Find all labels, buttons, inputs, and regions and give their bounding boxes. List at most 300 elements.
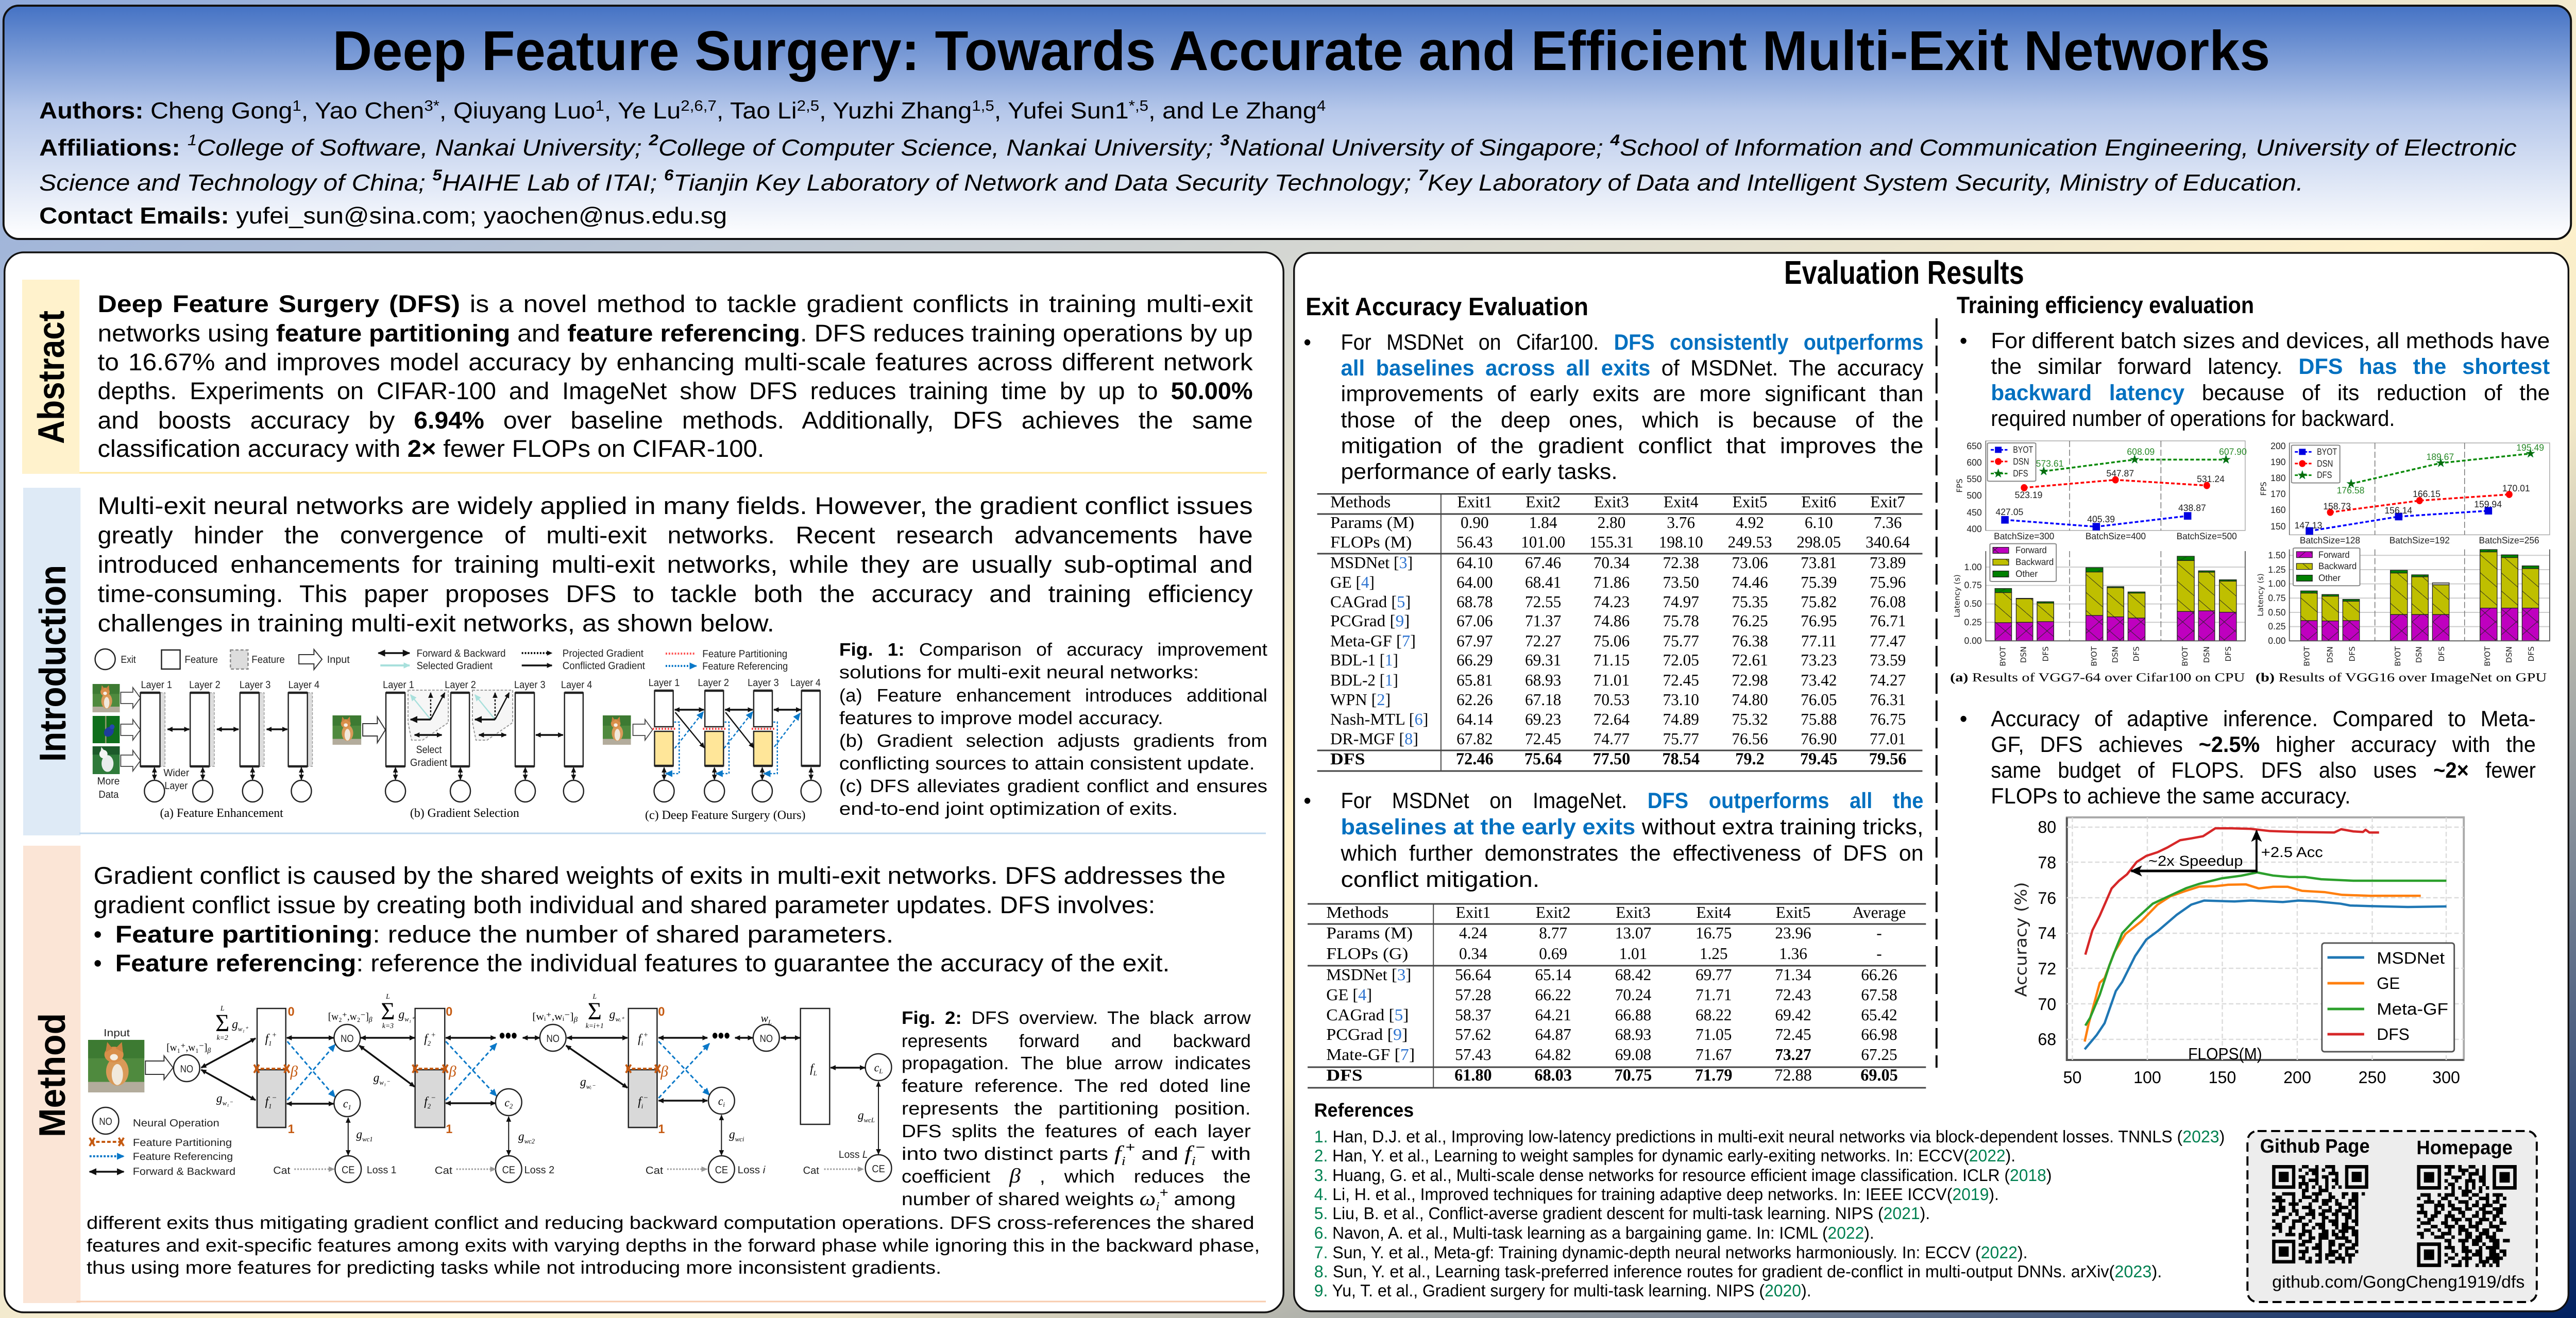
chart: VGG7-64 FPS line chart: 573.61 (2036, 458, 2063, 469)
table: imagenet: 71.71 (1696, 985, 1732, 1004)
chart: VGG16 latency bar chart: DSN (2326, 646, 2334, 663)
chart: VGG7-64 latency bar chart: DSN (2202, 646, 2211, 663)
figure 1 legend: Feature (184, 654, 218, 665)
table: cifar100: Meta-GF [7] (1330, 631, 1416, 650)
backward latency bullet: the similar forward latency. DFS has the shortest (1991, 354, 2550, 379)
table: imagenet: 71.79 (1695, 1066, 1732, 1085)
feature math labels: − (272, 1094, 277, 1102)
section: method (23, 846, 1266, 1303)
table: imagenet: DFS (1326, 1066, 1363, 1084)
table: cifar100: 73.42 (1801, 671, 1837, 689)
feature math labels: g (858, 1109, 864, 1122)
table: imagenet: 68.93 (1615, 1025, 1651, 1043)
feature math labels: wc2 (524, 1137, 535, 1145)
imagenet bullet: For MSDNet on ImageNet. DFS outperforms all the (1341, 789, 1923, 813)
table: cifar100: Params (M) (1330, 513, 1414, 532)
accuracy chart tick labels: 50 (2063, 1068, 2081, 1087)
chart: VGG16 FPS line chart: BatchSize=192 (2389, 535, 2450, 545)
table: cifar100: 73.06 (1732, 553, 1768, 572)
table: cifar100: 74.80 (1732, 690, 1768, 709)
table: imagenet: 72.45 (1775, 1025, 1811, 1043)
feature math labels: w₁⁺ (404, 1015, 415, 1023)
orange partition markers: 0 (446, 1005, 452, 1019)
neural operation and exit nodes: c (343, 1097, 348, 1110)
(a) feature enhancement: (a) Feature Enhancement (160, 807, 283, 820)
table: cifar100: 73.10 (1663, 690, 1699, 709)
neural operation and exit nodes: c (874, 1061, 879, 1074)
orange partition markers: 1 (446, 1122, 452, 1136)
(b) gradient selection: Layer 2 (445, 679, 476, 691)
chart: VGG7-64 FPS line chart: 550 (1967, 474, 1982, 484)
feature math labels: + (431, 1031, 436, 1039)
table: imagenet: 68.22 (1696, 1005, 1732, 1024)
table: imagenet: 64.87 (1535, 1025, 1571, 1043)
orange partition markers: 1 (658, 1122, 665, 1136)
chart: VGG16 latency bar chart: DSN (2504, 646, 2514, 663)
table: cifar100: 73.50 (1663, 573, 1699, 591)
figure 1 legend: Forward & Backward (417, 648, 505, 659)
references: 3. Huang, G. et al., Multi-scale dense networks for resource efficient image classification. ICLR (2018) (1314, 1166, 2052, 1185)
backward latency bullet: required number of operations for backward. (1991, 406, 2395, 431)
feature math labels: L (385, 993, 390, 1001)
feature math labels: 2 (428, 1102, 431, 1110)
references (1314, 1100, 2225, 1300)
table: cifar100: 72.61 (1732, 651, 1768, 669)
accuracy gain and speedup arrows: +2.5 Acc (2261, 844, 2323, 860)
orange partition markers: 0 (658, 1005, 665, 1019)
table: imagenet: 57.28 (1455, 985, 1492, 1004)
neural operation and exit nodes: ••• (499, 1024, 517, 1047)
table: cifar100: 71.86 (1594, 573, 1630, 591)
table: cifar100: 67.97 (1456, 631, 1493, 650)
orange partition markers: 0 (288, 1005, 295, 1019)
references: 8. Sun, Y. et al., Learning task-preferred inference routes for gradient de-conflict in multi-output DNNs. arXiv( 2023). (1314, 1262, 2162, 1281)
table: imagenet: 71.34 (1775, 965, 1811, 984)
figure 2 caption: feature reference. The red doted line (902, 1076, 1251, 1096)
chart: VGG7-64 latency bar chart: Forward (2015, 545, 2047, 555)
introduction text: introduced enhancements for training multi-exit networks, while they are usually sub-optimal and (97, 551, 1253, 578)
table: cifar100: Exit7 (1870, 492, 1905, 511)
figure 2 legend (90, 1107, 235, 1177)
figure 1 legend: Feature Partitioning (702, 648, 787, 660)
feature math labels: g (580, 1075, 586, 1089)
chart: VGG7-64 latency bar chart: 0.75 (1964, 580, 1982, 590)
chart: VGG7-64 FPS line chart: BYOT (2013, 444, 2033, 455)
chart: VGG16 FPS line chart: 156.14 (2384, 505, 2412, 516)
table: cifar100: 340.64 (1866, 533, 1910, 551)
chart: VGG7-64 latency bar chart: DFS (2132, 646, 2141, 661)
accuracy chart legend: Meta-GF (2377, 1000, 2448, 1018)
accuracy gain and speedup arrows (2131, 831, 2323, 872)
chart captions: (a) Results of VGG7-64 over Cifar100 on CPU (1950, 671, 2245, 684)
chart: VGG7-64 latency bar chart (1953, 544, 2245, 666)
feature math labels: k=3 (382, 1022, 394, 1030)
authors: , and Le Zhang (1148, 97, 1317, 124)
table: cifar100: 75.96 (1870, 573, 1906, 591)
table: cifar100: 67.46 (1525, 553, 1561, 572)
figure 2 caption: − (1196, 1139, 1205, 1155)
section: introduction (23, 488, 1267, 835)
figure 1 caption: (c) DFS alleviates gradient conflict and ensures (839, 776, 1267, 796)
feature math labels: g (374, 1071, 379, 1085)
table: cifar100: 72.05 (1663, 651, 1699, 669)
table: cifar100: 76.71 (1870, 611, 1906, 630)
table: cifar100: 64.10 (1456, 553, 1493, 572)
introduction text: challenges in training multi-exit networks, as shown below. (97, 609, 774, 637)
chart: VGG7-64 FPS line chart: 547.87 (2106, 468, 2134, 478)
affiliations: Affiliations: (39, 134, 180, 161)
figure 1 legend: Exit (121, 654, 136, 665)
neural operation and exit nodes: 1 (348, 1103, 351, 1111)
table: cifar100: Exit5 (1733, 492, 1767, 511)
header panel (4, 6, 2571, 239)
table: cifar100: 70.34 (1594, 553, 1630, 572)
table: imagenet: 68.42 (1615, 965, 1651, 984)
authors: 3* (424, 98, 439, 114)
table: cifar100: 78.54 (1662, 750, 1700, 768)
orange partition markers: β (660, 1063, 668, 1080)
table: imagenet: 57.43 (1455, 1045, 1492, 1064)
figure 1 legend: Input (327, 654, 350, 665)
feature math labels: i (641, 1039, 643, 1047)
loss labels: Loss i (738, 1165, 766, 1176)
table: imagenet: 70.24 (1615, 985, 1651, 1004)
table: cifar100: MSDNet [3] (1330, 553, 1413, 572)
chart: VGG7-64 FPS line chart: DFS (2013, 468, 2028, 478)
chart: VGG16 FPS line chart (2259, 441, 2550, 545)
(a) feature enhancement: Layer (164, 780, 188, 792)
table: imagenet: 4.24 (1459, 923, 1487, 942)
figure 2 legend: Neural Operation (133, 1118, 219, 1129)
table: imagenet: 68.03 (1534, 1066, 1572, 1085)
figure 1 caption: (a) Feature enhancement introduces additional (839, 686, 1267, 706)
table: imagenet: 69.42 (1775, 1005, 1811, 1024)
feature math labels: wcL (864, 1116, 875, 1124)
abstract text: to 16.67% and improves model accuracy by enhancing multi-scale features across different network (97, 348, 1253, 375)
introduction text (97, 492, 1253, 637)
chart: VGG7-64 FPS line chart: 400 (1967, 524, 1982, 534)
chart captions: (b) Results of VGG16 over ImageNet on GPU (2256, 671, 2547, 684)
table: cifar100: 79.56 (1869, 750, 1906, 768)
feature math labels: − (431, 1094, 436, 1102)
table: imagenet: PCGrad [ 9] (1326, 1025, 1408, 1043)
references: 1. Han, D.J. et al., Improving low-latency predictions in multi-exit neural networks via block-dependent losses. TNNLS (2023) (1314, 1127, 2225, 1146)
table: imagenet: 65.42 (1861, 1005, 1897, 1024)
table: cifar100: 72.98 (1732, 671, 1768, 689)
figure 1 caption: end-to-end joint optimization of exits. (839, 799, 1178, 819)
table: imagenet: CAGrad [ 5] (1326, 1005, 1409, 1024)
chart: VGG7-64 FPS line chart: BatchSize=400 (2086, 531, 2146, 541)
chart: VGG7-64 FPS line chart: DSN (2013, 456, 2029, 467)
method bottom text: features and exit-specific features among exits with varying depths in the forward phase while ignoring this in the backward phase, (87, 1236, 1260, 1256)
(c) deep feature surgery: (c) Deep Feature Surgery (Ours) (645, 809, 805, 822)
authors: , Tao Li (717, 97, 797, 124)
table: cifar100: 76.08 (1870, 592, 1906, 611)
table: cifar100: 75.78 (1663, 611, 1699, 630)
chart: VGG16 latency bar chart: 0.75 (2268, 593, 2286, 603)
table: imagenet: 66.22 (1535, 985, 1571, 1004)
chart: VGG16 FPS line chart: 195.49 (2516, 442, 2544, 453)
loss labels (273, 1149, 868, 1176)
abstract text: Deep Feature Surgery (DFS) is a novel method to tackle gradient conflicts in training multi-exit (97, 290, 1253, 317)
table: imagenet: 13.07 (1615, 923, 1651, 942)
figure 2 legend: Forward & Backward (133, 1166, 235, 1177)
table: imagenet: 72.88 (1774, 1066, 1812, 1085)
table: imagenet: 64.82 (1535, 1045, 1571, 1064)
chart: VGG7-64 latency bar chart: 0.25 (1964, 617, 1982, 627)
chart: VGG16 latency bar chart: 0.00 (2268, 636, 2286, 646)
authors: , Yao Chen (301, 97, 424, 124)
chart: VGG7-64 latency bar chart: BYOT (2180, 646, 2190, 666)
table: imagenet: Exit1 (1456, 903, 1490, 921)
authors: Authors: Cheng Gong (39, 97, 278, 124)
training efficiency heading: Training efficiency evaluation (1957, 292, 2254, 318)
accuracy chart legend: GE (2377, 974, 2400, 992)
figure 1 legend: Selected Gradient (417, 660, 493, 672)
table: cifar100: 73.59 (1870, 651, 1906, 669)
orange partition markers: β (448, 1063, 456, 1080)
table: cifar100: 298.05 (1797, 533, 1841, 551)
table: imagenet: Mate-GF [ 7] (1326, 1045, 1415, 1064)
adaptive inference bullet: FLOPs to achieve the same accuracy. (1991, 784, 2350, 809)
table: cifar100: 1.84 (1529, 513, 1557, 532)
table: cifar100: 0.90 (1461, 513, 1489, 532)
affiliations: College of Software, Nankai University; (197, 134, 649, 161)
feature math labels: + (643, 1031, 648, 1039)
authors: , Qiuyang Luo (439, 97, 595, 124)
feature math labels: L (813, 1069, 817, 1077)
chart: VGG16 latency bar chart: DFS (2527, 646, 2536, 661)
table: cifar100: 75.77 (1663, 729, 1699, 748)
table: imagenet: 71.67 (1696, 1045, 1732, 1064)
introduction side label: Introduction (32, 565, 74, 762)
table: cifar100: 69.23 (1525, 710, 1561, 728)
chart: accuracy vs FLOPs: FLOPS(M) (2188, 1045, 2262, 1063)
feature math labels: w₁⁻ (223, 1099, 233, 1107)
QR code box (2247, 1131, 2537, 1302)
table: imagenet: 72.43 (1775, 985, 1811, 1004)
neural operation and exit nodes (174, 1024, 891, 1183)
feature math labels: g (232, 1018, 238, 1031)
loss labels: Cat (646, 1165, 664, 1176)
chart: VGG16 latency bar chart (2256, 548, 2550, 666)
table: cifar100: Methods (1330, 492, 1391, 511)
QR code box: Github Page (2260, 1136, 2370, 1157)
exit accuracy heading: Exit Accuracy Evaluation (1306, 293, 1588, 321)
feature math labels: Σ (588, 998, 602, 1025)
method intro text: gradient conflict issue by creating both individual and shared parameter updates. DFS involves: (94, 891, 1155, 918)
(b) gradient selection: Layer 4 (561, 679, 592, 691)
table: cifar100: 75.06 (1594, 631, 1630, 650)
table: cifar100: 77.01 (1870, 729, 1906, 748)
method intro text: Feature partitioning : reduce the number of shared parameters. (115, 920, 893, 948)
feature math labels: k=2 (217, 1034, 228, 1042)
table: imagenet: 1.01 (1619, 944, 1647, 963)
references: 5. Liu, B. et al., Conflict-averse gradient descent for multi-task learning. NIPS (2021). (1314, 1204, 1930, 1223)
table: imagenet: 16.75 (1696, 923, 1732, 942)
figure 2 caption: into two distinct parts f (902, 1141, 1120, 1165)
(b) gradient selection: Gradient (410, 757, 448, 768)
chart: VGG16 latency bar chart: 1.00 (2268, 578, 2286, 589)
feature math labels: [wᵢ⁺,wᵢ⁻] (532, 1011, 570, 1022)
affiliations: 6 (664, 167, 674, 184)
chart: VGG7-64 latency bar chart: 1.00 (1964, 562, 1982, 572)
(a) feature enhancement: Layer 1 (141, 679, 172, 691)
table: cifar100: 75.39 (1801, 573, 1837, 591)
imagenet bullet: baselines at the early exits without extra training tricks, (1341, 815, 1923, 840)
accuracy chart tick labels: 78 (2038, 853, 2056, 872)
affiliations: 2 (648, 132, 658, 149)
cifar100 bullet: improvements of early exits are more significant than (1341, 382, 1923, 406)
table: imagenet: 23.96 (1775, 923, 1811, 942)
chart: VGG7-64 FPS line chart: 427.05 (1996, 507, 2023, 517)
accuracy chart tick labels: 72 (2038, 959, 2056, 978)
table: cifar100: Exit6 (1801, 492, 1836, 511)
table: imagenet: 56.64 (1455, 965, 1492, 984)
references: 4. Li, H. et al., Improved techniques for training adaptive deep networks. In: IEEE ICCV(2019). (1314, 1185, 1999, 1204)
table: cifar100: 101.00 (1521, 533, 1565, 551)
table: cifar100: WPN [2] (1330, 690, 1391, 709)
chart: VGG7-64 FPS line chart: BatchSize=500 (2177, 531, 2237, 541)
figure 2 caption: represents forward and backward (902, 1031, 1251, 1051)
black arrows (201, 1038, 878, 1155)
cifar100 bullet: • (1303, 330, 1311, 355)
table: cifar100: 76.75 (1870, 710, 1906, 728)
feature math labels: g (729, 1128, 735, 1141)
(a) feature enhancement: Data (98, 789, 119, 800)
feature math labels: [w₁⁺,w₁⁻] (166, 1042, 208, 1053)
authors: 2,6,7 (681, 98, 717, 114)
chart: VGG16 latency bar chart: DSN (2415, 646, 2424, 663)
table: cifar100: 67.06 (1456, 611, 1493, 630)
feature math labels: − (643, 1094, 648, 1102)
table: cifar100: 76.90 (1801, 729, 1837, 748)
feature math labels (166, 993, 875, 1145)
references: 2. Han, Y. et al., Learning to weight samples for dynamic early-exiting networks. In: ECCV(2022). (1314, 1146, 2015, 1165)
abstract text: depths. Experiments on CIFAR-100 and ImageNet show DFS reduces training time by up to 50.00% (97, 377, 1253, 404)
(a) feature enhancement: Layer 2 (189, 679, 221, 691)
cifar100 bullet: those of the deep ones, which is because of the (1341, 408, 1923, 433)
affiliations (39, 132, 2517, 196)
table: cifar100: 71.01 (1594, 671, 1630, 689)
feature math labels: w (761, 1012, 768, 1024)
loss labels: Loss L (839, 1149, 868, 1160)
feature math labels: wc1 (362, 1135, 373, 1143)
(c) deep feature surgery: Layer 1 (649, 677, 680, 689)
table: cifar100: 79.45 (1800, 750, 1838, 768)
accuracy chart tick labels: 68 (2038, 1030, 2056, 1049)
blue referencing arrows (287, 1041, 709, 1100)
affiliations: 4 (1610, 132, 1620, 149)
imagenet bullet: which further demonstrates the effectiveness of DFS on (1341, 841, 1923, 866)
chart: VGG7-64 latency bar chart: BYOT (2090, 646, 2098, 666)
accuracy chart tick labels: 250 (2359, 1068, 2386, 1087)
chart: accuracy vs FLOPs (2011, 817, 2464, 1087)
affiliations: College of Computer Science, Nankai University; (658, 134, 1220, 161)
backward latency bullet: • (1960, 329, 1967, 353)
table: cifar100: 75.35 (1732, 592, 1768, 611)
table: cifar100: DFS (1330, 749, 1365, 768)
method intro text: Gradient conflict is caused by the shared weights of exits in multi-exit networks. DFS addresses the (94, 862, 1226, 889)
feature math labels: f (638, 1095, 641, 1108)
accuracy chart tick labels: 76 (2038, 888, 2056, 908)
QR code box: github.com/GongCheng1919/dfs (2272, 1272, 2524, 1291)
table: cifar100: 67.82 (1456, 729, 1493, 748)
table: cifar100: 68.41 (1525, 573, 1561, 591)
backward latency bullet: For different batch sizes and devices, all methods have (1991, 329, 2550, 353)
table: imagenet: 71.05 (1696, 1025, 1732, 1043)
chart: VGG7-64 FPS line chart: 438.87 (2178, 503, 2206, 513)
authors: , Yufei Sun1 (994, 97, 1129, 124)
table: imagenet: - (1876, 923, 1882, 942)
table: imagenet: 0.34 (1459, 944, 1487, 963)
authors: 4 (1317, 98, 1326, 114)
neural operation and exit nodes: NO (547, 1033, 560, 1045)
feature math labels: 1 (268, 1039, 272, 1047)
table: cifar100: 72.46 (1456, 750, 1494, 768)
chart: VGG16 latency bar chart: 1.25 (2268, 564, 2286, 575)
table: cifar100: Exit2 (1526, 492, 1561, 511)
method intro text (94, 862, 1226, 977)
title: Deep Feature Surgery: Towards Accurate and Efficient Multi-Exit Networks (333, 20, 2270, 82)
chart: VGG16 latency bar chart: Backward (2318, 561, 2357, 571)
figure 2 caption: + (1160, 1185, 1168, 1200)
backward latency bullet (1960, 329, 2550, 431)
chart: VGG16 latency bar chart: BYOT (2302, 646, 2311, 666)
table: imagenet: Exit2 (1536, 903, 1571, 921)
loss labels: Loss 1 (367, 1165, 397, 1176)
chart: VGG16 FPS line chart: 147.13 (2295, 520, 2322, 530)
table: cifar100: 249.53 (1728, 533, 1772, 551)
figure 2 caption: and (1135, 1144, 1184, 1164)
feature layers (257, 1008, 829, 1127)
chart: VGG16 FPS line chart: 189.67 (2426, 452, 2454, 462)
figure 2 caption: f (1184, 1141, 1195, 1165)
feature math labels: L (220, 1005, 225, 1013)
figure 2 caption (902, 1008, 1251, 1213)
feature math labels: L (768, 1018, 772, 1026)
feature math labels: f (265, 1032, 268, 1046)
figure 2 caption: among (1168, 1189, 1235, 1209)
figure 2 legend: NO (99, 1116, 112, 1127)
feature math labels: g (609, 1008, 615, 1021)
affiliations: HAIHE Lab of ITAI; (442, 169, 664, 196)
feature math labels: + (272, 1031, 277, 1039)
table: cifar100: 76.05 (1801, 690, 1837, 709)
chart: VGG7-64 FPS line chart: BatchSize=300 (1994, 531, 2054, 541)
table: imagenet (1308, 903, 1926, 1088)
feature math labels: f (424, 1095, 428, 1108)
figure 1 caption: conflicting sources to attain consistent update. (839, 754, 1255, 774)
figure 1 legend (95, 648, 788, 672)
chart: VGG7-64 FPS line chart: 607.90 (2219, 447, 2247, 457)
accuracy chart tick labels (2038, 817, 2460, 1087)
table: imagenet: MSDNet [3] (1326, 965, 1411, 984)
chart: VGG7-64 FPS line chart: 523.19 (2015, 490, 2042, 500)
chart: VGG7-64 latency bar chart: DFS (2041, 646, 2050, 661)
abstract text: networks using feature partitioning and feature referencing . DFS reduces training operations by up (97, 319, 1253, 347)
table: cifar100: 72.45 (1525, 729, 1561, 748)
loss labels: Cat (273, 1165, 291, 1176)
figure 2 caption: Fig. 2: DFS overview. The black arrow (902, 1008, 1251, 1028)
table: cifar100: 74.23 (1594, 592, 1630, 611)
accuracy gain and speedup arrows: ~2x Speedup (2148, 853, 2243, 869)
table: imagenet: 57.62 (1455, 1025, 1492, 1043)
feature math labels: wᵢ⁻ (586, 1083, 596, 1090)
feature math labels: wᵢ⁺ (615, 1015, 625, 1023)
method intro text: Feature referencing : reference the individual features to guarantee the accuracy of the exit. (115, 949, 1170, 977)
table: cifar100: 70.53 (1594, 690, 1630, 709)
